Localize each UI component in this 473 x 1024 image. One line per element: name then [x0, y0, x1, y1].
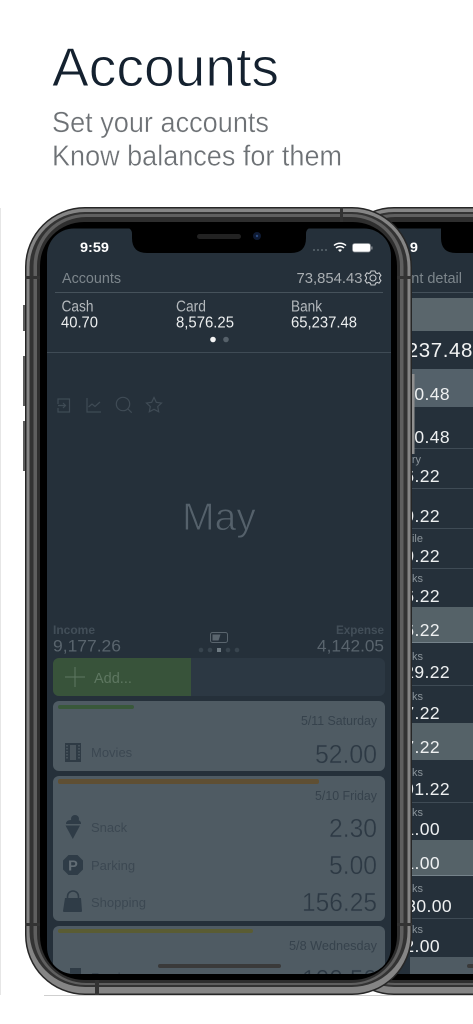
icon: card switch and page dots [199, 632, 239, 652]
balance rows: Drinks [392, 883, 423, 895]
second phone screen content [410, 242, 473, 974]
balance rows: 1.00 [404, 819, 440, 839]
card: 5/10 Friday: Shopping [91, 895, 146, 910]
add bar: Add... [94, 671, 132, 687]
balance rows: 6.22 [404, 466, 440, 486]
month label: May [182, 496, 256, 539]
balance rows: Mobile [391, 533, 423, 545]
balance rows: 6.22 [404, 620, 440, 640]
icon: export [58, 399, 70, 412]
income summary [53, 625, 121, 656]
second phone notch [441, 228, 473, 253]
balance rows: 1.00 [404, 853, 440, 873]
balance rows: 2.00 [404, 936, 440, 956]
account: card: Card [176, 298, 206, 316]
icon: shopping bag [63, 891, 82, 912]
subtitle: Know balances for them [52, 140, 342, 172]
balance rows: Drinks [392, 573, 423, 585]
account: bank: Bank [291, 298, 322, 316]
income summary: Income [53, 625, 95, 637]
expense summary: 4,142.05 [317, 636, 384, 656]
second phone frame [334, 207, 473, 995]
account: cash: Cash [62, 298, 94, 316]
speaker [197, 234, 241, 239]
icon: search [116, 397, 132, 413]
front phone frame [25, 207, 412, 995]
card: 5/8 Wednesday: 100.50 [302, 964, 377, 994]
account balances [61, 300, 356, 330]
front phone screen [47, 228, 391, 996]
title: Accounts [52, 36, 279, 98]
card: 5/10 Friday: Snack [91, 820, 128, 835]
card: 5/10 Friday: 5.00 [329, 850, 377, 880]
balance rows: Salary [390, 454, 421, 466]
account: bank: 65,237.48 [291, 314, 357, 332]
second phone header: Account detail [371, 271, 462, 287]
second phone home indicator [467, 964, 473, 968]
toolbar icons [58, 397, 162, 413]
card: 5/10 Friday: 156.25 [302, 887, 377, 917]
balance rows: 191.22 [394, 779, 450, 799]
balance rows: 7.22 [404, 703, 440, 723]
balance rows: 65,237.48 [376, 339, 473, 362]
subtitle [52, 107, 342, 172]
balance rows: Drinks [392, 691, 423, 703]
expense summary: Expense [336, 625, 384, 637]
balance rows: Drinks [392, 807, 423, 819]
icon: movies film [65, 743, 81, 762]
account: cash: 40.70 [61, 314, 98, 332]
icon: star [146, 398, 162, 412]
front phone side buttons [23, 305, 414, 471]
card: 5/11 Saturday: Movies [91, 745, 133, 760]
card: 5/8 Wednesday: Food [91, 970, 121, 985]
expense summary [317, 625, 384, 656]
status bar time: 9:59 [80, 240, 109, 255]
balance rows: 7.22 [404, 737, 440, 757]
bottom shadow [44, 995, 473, 996]
card: 5/10 Friday [53, 776, 385, 921]
status bar icons [313, 243, 372, 252]
card: 5/10 Friday: 5/10 Friday [315, 788, 377, 803]
card: 5/10 Friday: 2.30 [329, 813, 377, 843]
camera [253, 232, 261, 240]
balance rows: 130.00 [396, 896, 452, 916]
second phone: account detail [373, 207, 473, 995]
balance rows: Drinks [392, 924, 423, 936]
icon: parking sign: P [68, 858, 78, 874]
card: 5/11 Saturday [53, 701, 385, 771]
icon: settings gear [365, 271, 381, 285]
front phone notch [128, 228, 310, 253]
card: 5/8 Wednesday: 5/8 Wednesday [289, 938, 377, 953]
home indicator [158, 964, 281, 968]
subtitle: Set your accounts [52, 107, 269, 139]
balance rows: 129.22 [394, 662, 450, 682]
card: 5/11 Saturday: 52.00 [315, 739, 377, 769]
card: 5/10 Friday: Parking [91, 858, 135, 873]
accounts header: 73,854.43 [296, 270, 362, 287]
balance rows: Drinks [392, 767, 423, 779]
accounts header: Accounts [62, 270, 121, 287]
balance rows: 9.22 [404, 546, 440, 566]
second phone status time: 9:59 [389, 240, 418, 255]
balance rows: 9.22 [404, 506, 440, 526]
balance rows: 6.22 [404, 586, 440, 606]
balance rows: 7,160.48 [379, 384, 450, 404]
add bar [53, 658, 385, 696]
balance rows: 7,160.48 [379, 427, 450, 447]
icon: chart [87, 398, 101, 412]
account: card [176, 300, 234, 330]
income summary: 9,177.26 [53, 636, 121, 656]
icon: parking sign [63, 855, 83, 875]
balance rows [410, 298, 473, 974]
account: bank [292, 300, 356, 330]
page dots [210, 337, 229, 342]
card: 5/11 Saturday: 5/11 Saturday [301, 713, 377, 728]
account: card: 8,576.25 [176, 314, 234, 332]
account: cash [61, 300, 98, 328]
accounts header [55, 273, 383, 293]
icon: snack ice cream [66, 815, 81, 839]
card: 5/8 Wednesday [53, 926, 385, 974]
balance rows: Drinks [392, 651, 423, 663]
